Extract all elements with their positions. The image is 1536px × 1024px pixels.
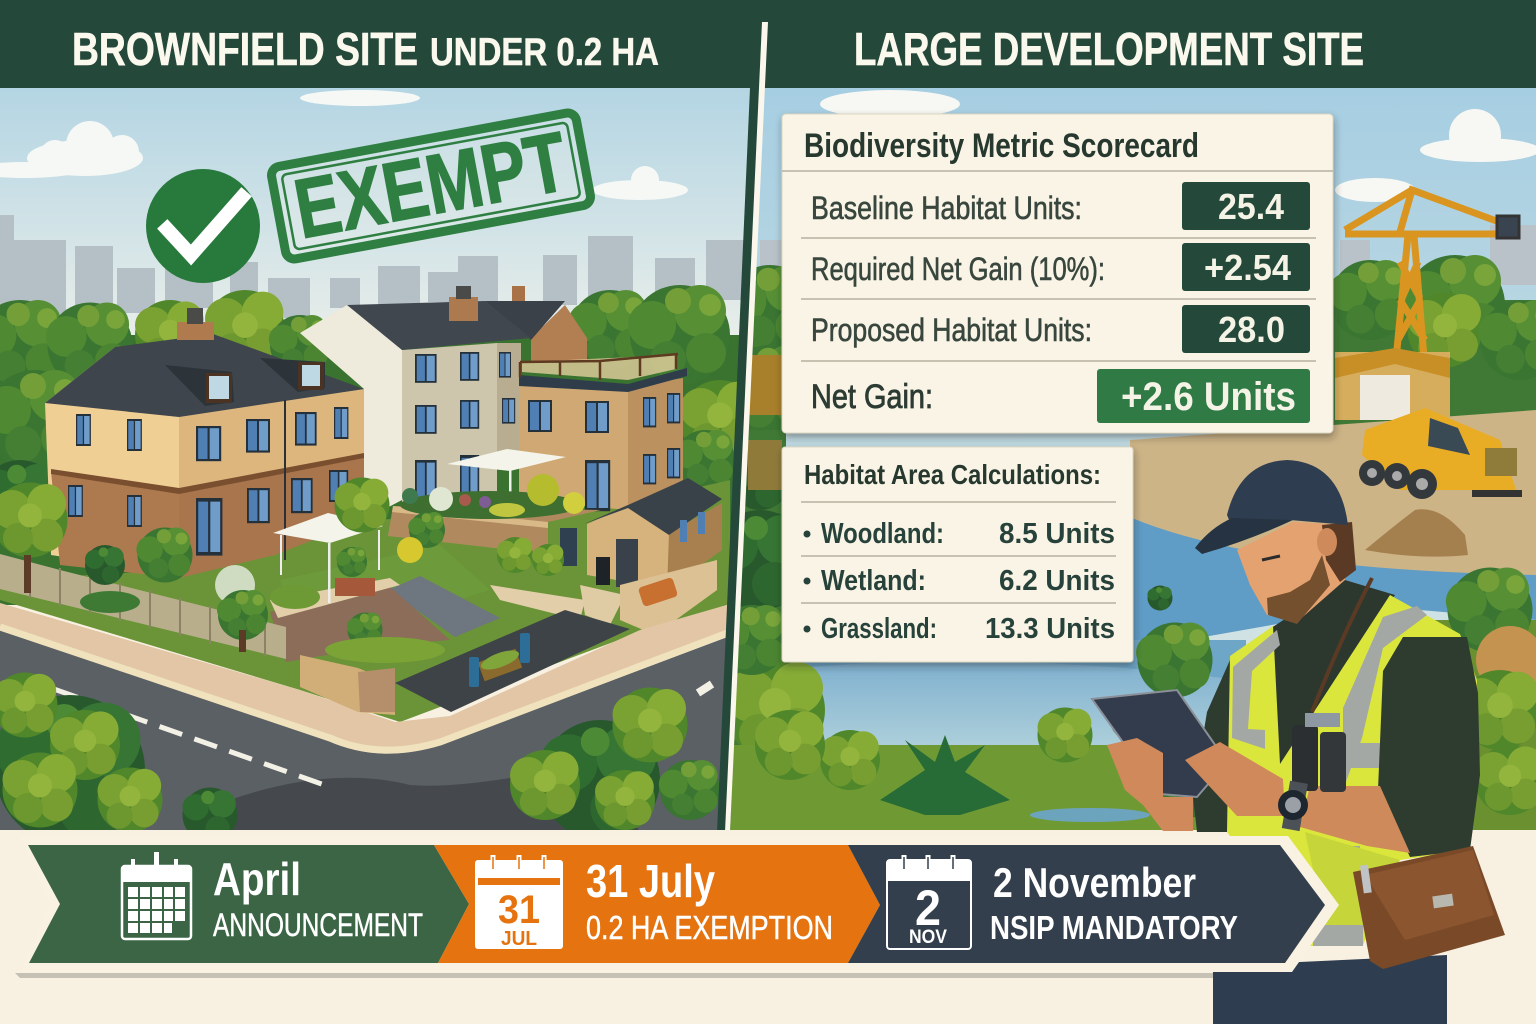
row: required net gain: Required Net Gain (10%): [811,251,1105,287]
step: 2 november nsip mandatory: NSIP MANDATORY [990,909,1238,946]
yard ground [0,480,730,722]
panel: brownfield site scene [0,88,760,845]
building: right tan block with roof terrace [519,354,687,511]
navy cap [1195,460,1348,554]
row: wetland [804,565,1115,597]
tablet [1092,690,1227,797]
binoculars [1292,713,1346,792]
right sleeve [1378,637,1480,857]
panel: biodiversity metric scorecard [782,114,1333,433]
step: 2 november nsip mandatory [848,845,1325,963]
sidewalk and road [0,603,730,832]
lower garden, gazebo and steps [270,478,717,663]
icon: calendar 31 jul: JUL [501,928,537,950]
step: 31 july exemption: 31 July [586,855,715,907]
icon: calendar 2 nov: 2 [915,880,941,936]
icon: calendar 31 jul: 31 [498,888,540,932]
tree line [723,255,1536,435]
terrace planter with flowers [388,474,601,554]
row: required net gain: +2.54 [1204,247,1291,288]
row: grassland: Grassland: [821,613,937,645]
step: april announcement: April [213,853,301,905]
hands and left arm [1107,738,1285,831]
wooden fence [0,554,286,659]
shirt front [1268,580,1395,775]
background trees [0,285,760,605]
building: rear white and cream block [300,286,587,520]
building: left townhouse [45,308,364,578]
row: baseline habitat units [811,182,1310,230]
high-vis vest [1227,595,1477,946]
row dividers [782,171,1333,361]
row: woodland: 8.5 Units [999,518,1115,550]
clouds [820,90,1536,202]
row: wetland: Wetland: [821,565,926,597]
row: required net gain [811,243,1310,291]
timeline banner [15,836,1339,978]
icon: calendar 31 jul [475,855,563,950]
stamp: exempt: EXEMPT [288,114,574,256]
header bar [0,0,1536,88]
row: baseline habitat units: 25.4 [1218,186,1284,227]
row: grassland: 13.3 Units [985,613,1115,645]
river and pond [790,518,1536,745]
scorecard title: Biodiversity Metric Scorecard [804,127,1199,165]
left bank vegetation [730,355,1212,830]
row: baseline habitat units: Baseline Habitat Units: [811,190,1082,226]
row: net gain: +2.6 Units [1121,375,1296,419]
row: proposed habitat units [811,305,1310,353]
small tan annex house [560,478,722,590]
icon: calendar grid [122,852,191,939]
jeans [1213,955,1447,1024]
row: woodland [804,518,1115,550]
foreground trees [0,672,720,845]
step: april announcement: ANNOUNCEMENT [213,907,423,943]
row: net gain: Net Gain: [811,378,933,416]
row: grassland [804,613,1115,645]
messenger bag [1353,846,1505,969]
row: proposed habitat units: Proposed Habitat Units: [811,312,1092,348]
row: net gain [811,369,1310,423]
distant buildings [760,225,1536,285]
row: proposed habitat units: 28.0 [1218,309,1285,350]
distant city skyline [0,215,744,318]
left sleeve [1193,660,1240,832]
heading: brownfield site: UNDER 0.2 HA [430,31,659,74]
icon: calendar 2 nov: NOV [909,927,947,948]
habitat title: Habitat Area Calculations: [804,459,1101,490]
right bank vegetation [1148,568,1536,835]
clouds [0,90,688,200]
banner shadow [15,973,1213,978]
banner outline [20,836,1339,972]
site cabin [1335,348,1450,420]
panel divider [717,22,768,832]
tower crane [1345,190,1520,370]
step: 2 november nsip mandatory: 2 November [993,859,1196,906]
yellow dump truck [1359,408,1522,499]
soil mound [1365,509,1468,557]
shoulder strap [1312,578,1372,712]
row dividers [801,502,1116,603]
wristwatch [1278,781,1308,831]
heading: brownfield site: BROWNFIELD SITE [72,23,418,75]
icon: green check badge [146,169,260,283]
palm plant [880,735,1010,815]
construction dirt ground [1130,410,1536,575]
row: woodland: Woodland: [821,518,944,550]
step: april announcement [28,845,469,963]
illustration: ecologist with tablet [1092,460,1505,1024]
heading: large development site: LARGE DEVELOPMENT SITE [854,23,1364,75]
step: 31 july exemption: 0.2 HA EXEMPTION [586,909,833,946]
patio umbrella upper [448,449,566,492]
row: wetland: 6.2 Units [999,565,1115,597]
head with face and beard [1237,522,1356,624]
panel: habitat area calculations [782,447,1133,662]
panel: large development site scene [710,88,1536,838]
garden shrubs and trees [0,482,320,652]
icon: calendar 2 nov [887,855,971,949]
forearm [1300,786,1410,853]
step: 31 july exemption [434,845,880,963]
bottom cream strip [0,830,1536,1024]
